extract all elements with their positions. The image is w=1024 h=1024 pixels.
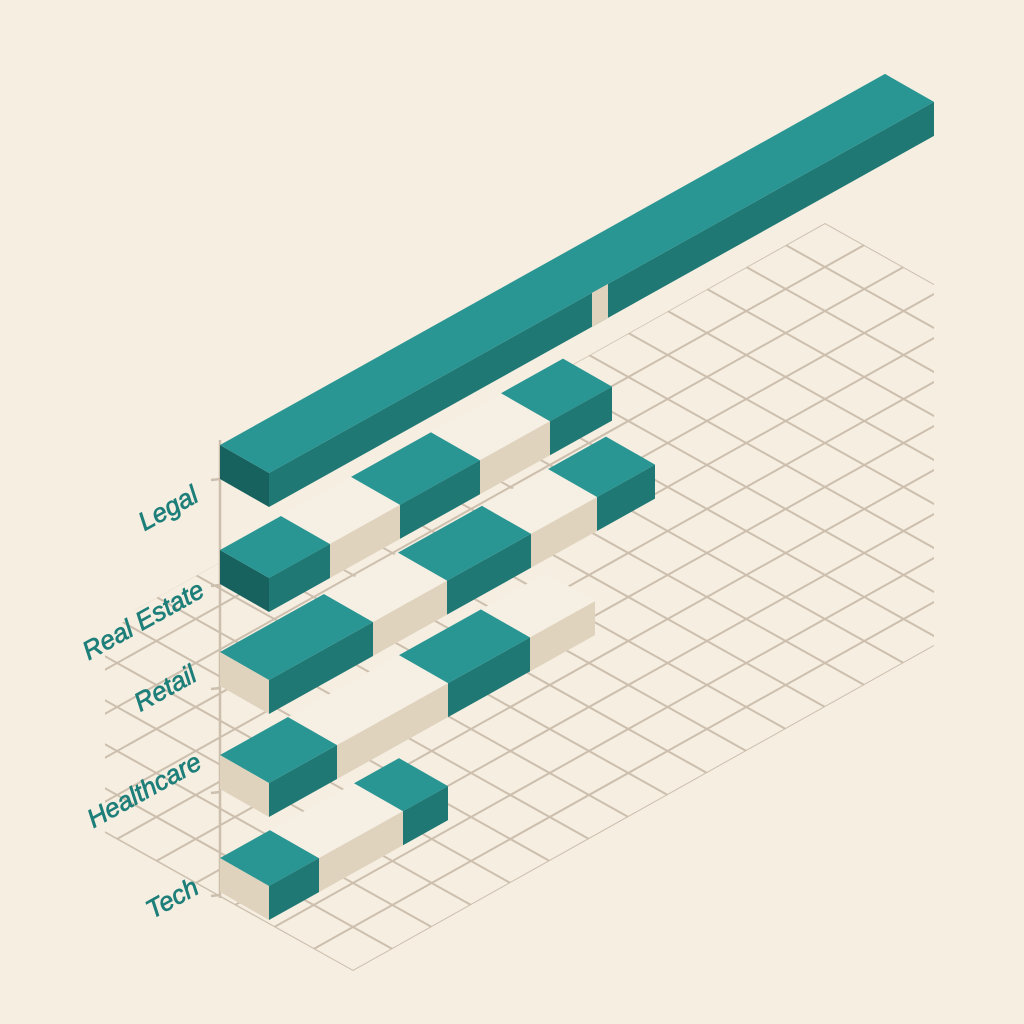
label: Legal: Legal [133, 479, 204, 537]
bar: Healthcare [220, 573, 595, 817]
label: Tech: Tech [140, 871, 204, 925]
bar: Retail [220, 437, 655, 714]
label: Real Estate: Real Estate [77, 574, 209, 666]
floor grid [105, 223, 934, 971]
label: Healthcare: Healthcare [82, 746, 206, 834]
bar: Real Estate [220, 359, 612, 612]
vertical axis with ticks [211, 440, 220, 898]
label: Retail: Retail [129, 658, 202, 717]
bar: Legal [220, 74, 934, 507]
bar: Tech [220, 758, 448, 920]
